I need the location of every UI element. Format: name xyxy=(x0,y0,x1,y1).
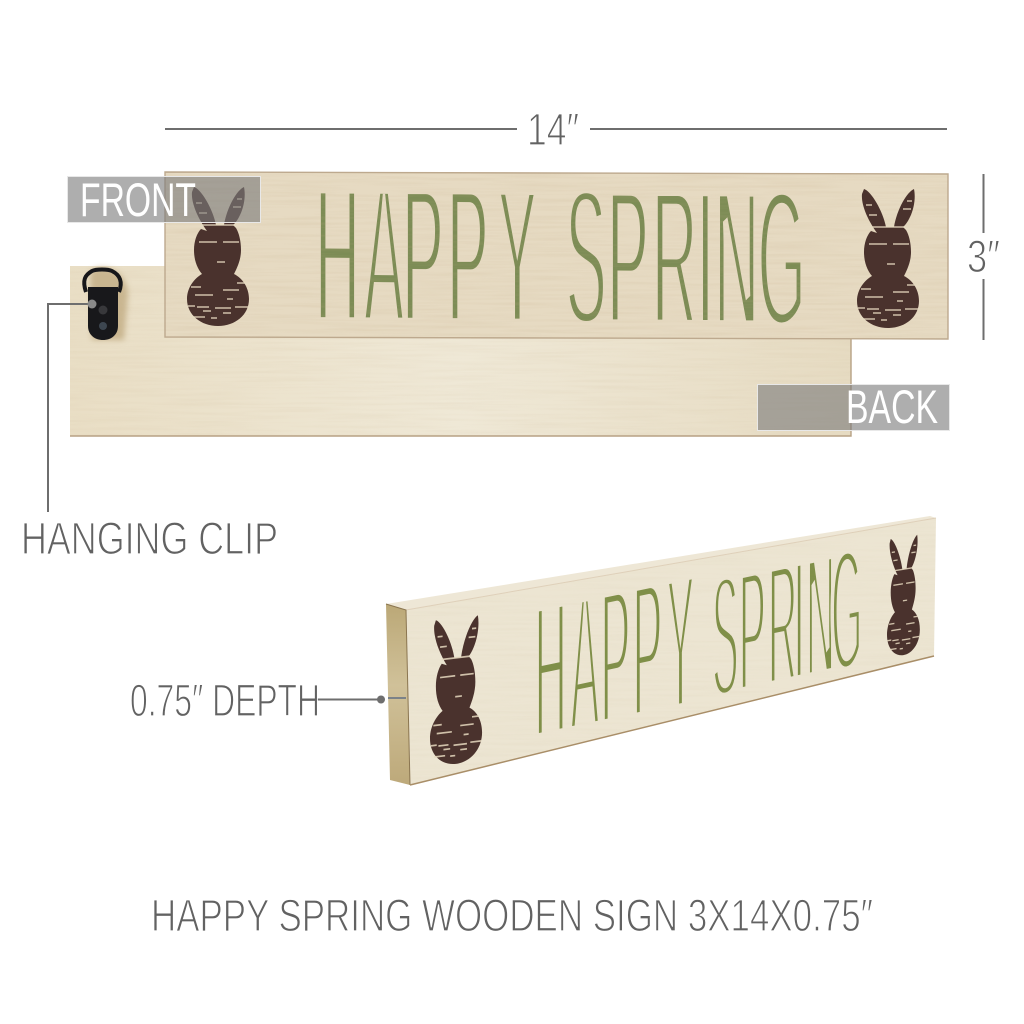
icon: hanging clip xyxy=(84,267,128,340)
side edge xyxy=(386,604,410,785)
callout: hanging clip xyxy=(21,300,278,564)
front face xyxy=(406,518,936,785)
lettering: angled SPRING: SPRING xyxy=(711,505,863,740)
back board xyxy=(70,266,851,436)
dimension: 3 inch height: 3″ xyxy=(967,231,1000,282)
callout: hanging clip: HANGING CLIP xyxy=(21,513,278,564)
angled sign xyxy=(386,505,936,787)
lettering: angled HAPPY: HAPPY xyxy=(534,528,696,787)
icon: bunny left xyxy=(187,187,249,326)
icon: bunny right xyxy=(857,189,919,328)
label: back xyxy=(758,380,950,433)
label: front: FRONT xyxy=(80,173,196,226)
icon: bunny far xyxy=(887,534,920,658)
lettering: angled words xyxy=(538,554,859,733)
front board with sign lettering xyxy=(165,143,948,371)
icon: bunny large xyxy=(430,615,482,767)
lettering: front sign: HAPPY SPRING xyxy=(314,143,807,371)
label: back: BACK xyxy=(846,380,938,433)
top edge xyxy=(386,516,936,610)
callout: depth: 0.75″ DEPTH xyxy=(130,675,320,726)
dimension: 14 inch width: 14″ xyxy=(527,104,579,155)
